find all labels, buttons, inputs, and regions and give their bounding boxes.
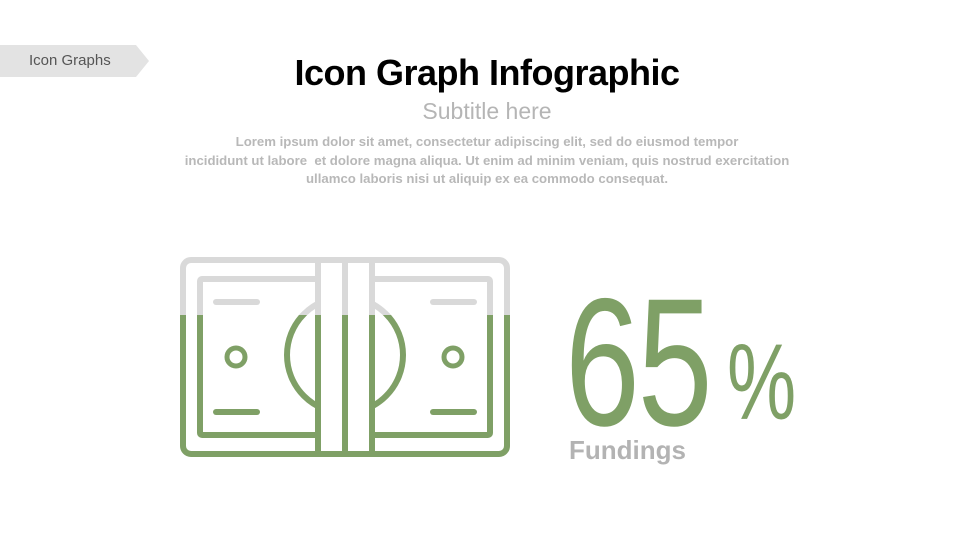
body text: Lorem ipsum dolor sit amet, consectetur adipiscing elit, sed do eiusmod tempor	[236, 134, 738, 149]
icon: money bill graph	[180, 257, 510, 457]
value: 65%: 65	[565, 260, 710, 464]
body text	[185, 134, 789, 186]
tab: Icon Graphs: Icon Graphs	[29, 52, 111, 69]
body text: ullamco laboris nisi ut aliquip ex ea commodo consequat.	[306, 171, 668, 186]
subtitle: Subtitle here	[422, 98, 552, 124]
body text: incididunt ut labore et dolore magna aliqua. Ut enim ad minim veniam, quis nostrud exercitation	[185, 152, 789, 168]
value: 65%: %	[727, 321, 796, 442]
value: 65%	[565, 260, 796, 464]
title: Icon Graph Infographic	[294, 52, 680, 93]
tab: Icon Graphs	[0, 45, 149, 77]
label: Fundings: Fundings	[569, 435, 686, 465]
